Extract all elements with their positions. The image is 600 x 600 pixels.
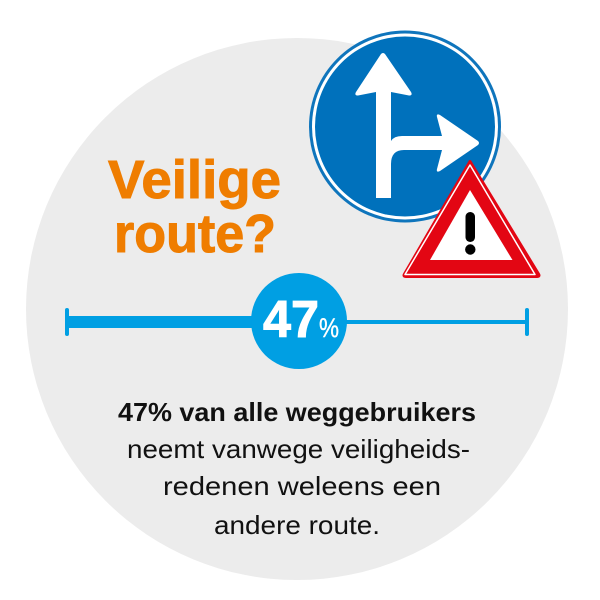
description text: redenen weleens een — [163, 471, 441, 501]
description text: neemt vanwege veiligheids- — [127, 434, 470, 464]
title: route? — [114, 204, 276, 264]
percentage badge — [251, 273, 347, 369]
description text — [118, 397, 476, 540]
progress bar — [65, 308, 529, 336]
percentage badge: % — [319, 313, 339, 343]
icon: warning triangle — [404, 162, 539, 276]
title — [108, 150, 281, 264]
description text: andere route. — [214, 510, 380, 540]
icon: blue direction sign — [309, 30, 501, 222]
percentage badge: 47 — [263, 291, 319, 349]
title: Veilige — [108, 150, 281, 210]
description text: 47% van alle weggebruikers — [118, 397, 476, 427]
